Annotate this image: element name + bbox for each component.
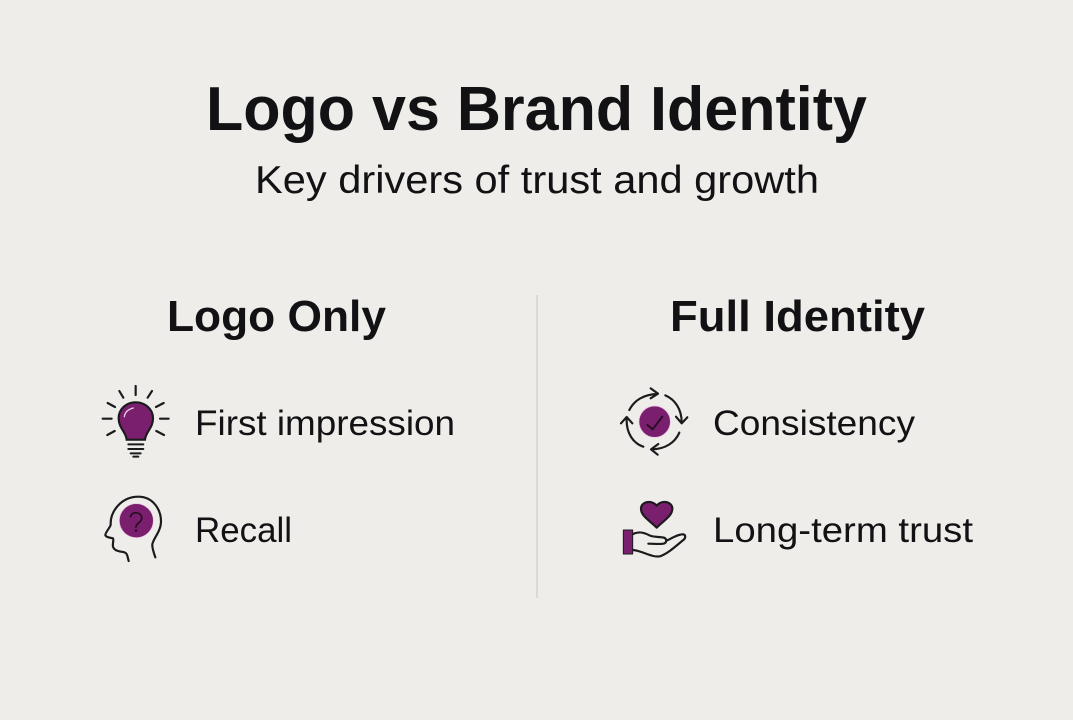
- label: recall: Recall: [195, 511, 292, 550]
- label: first impression: First impression: [195, 404, 455, 443]
- label: long-term trust: Long-term trust: [713, 511, 973, 550]
- panel: full identity: [621, 292, 973, 557]
- panel: logo only: [103, 292, 455, 561]
- icon: hand with heart: [623, 502, 685, 557]
- subtitle: Key drivers of trust and growth: [255, 159, 819, 202]
- heading: full identity: Full Identity: [670, 292, 926, 341]
- icon: head with question mark: [105, 497, 161, 561]
- title: Logo vs Brand Identity: [206, 75, 867, 144]
- icon: cycle with check: [621, 388, 687, 455]
- icon: light bulb: [103, 386, 169, 457]
- heading: logo only: Logo Only: [167, 292, 387, 341]
- label: consistency: Consistency: [713, 404, 916, 443]
